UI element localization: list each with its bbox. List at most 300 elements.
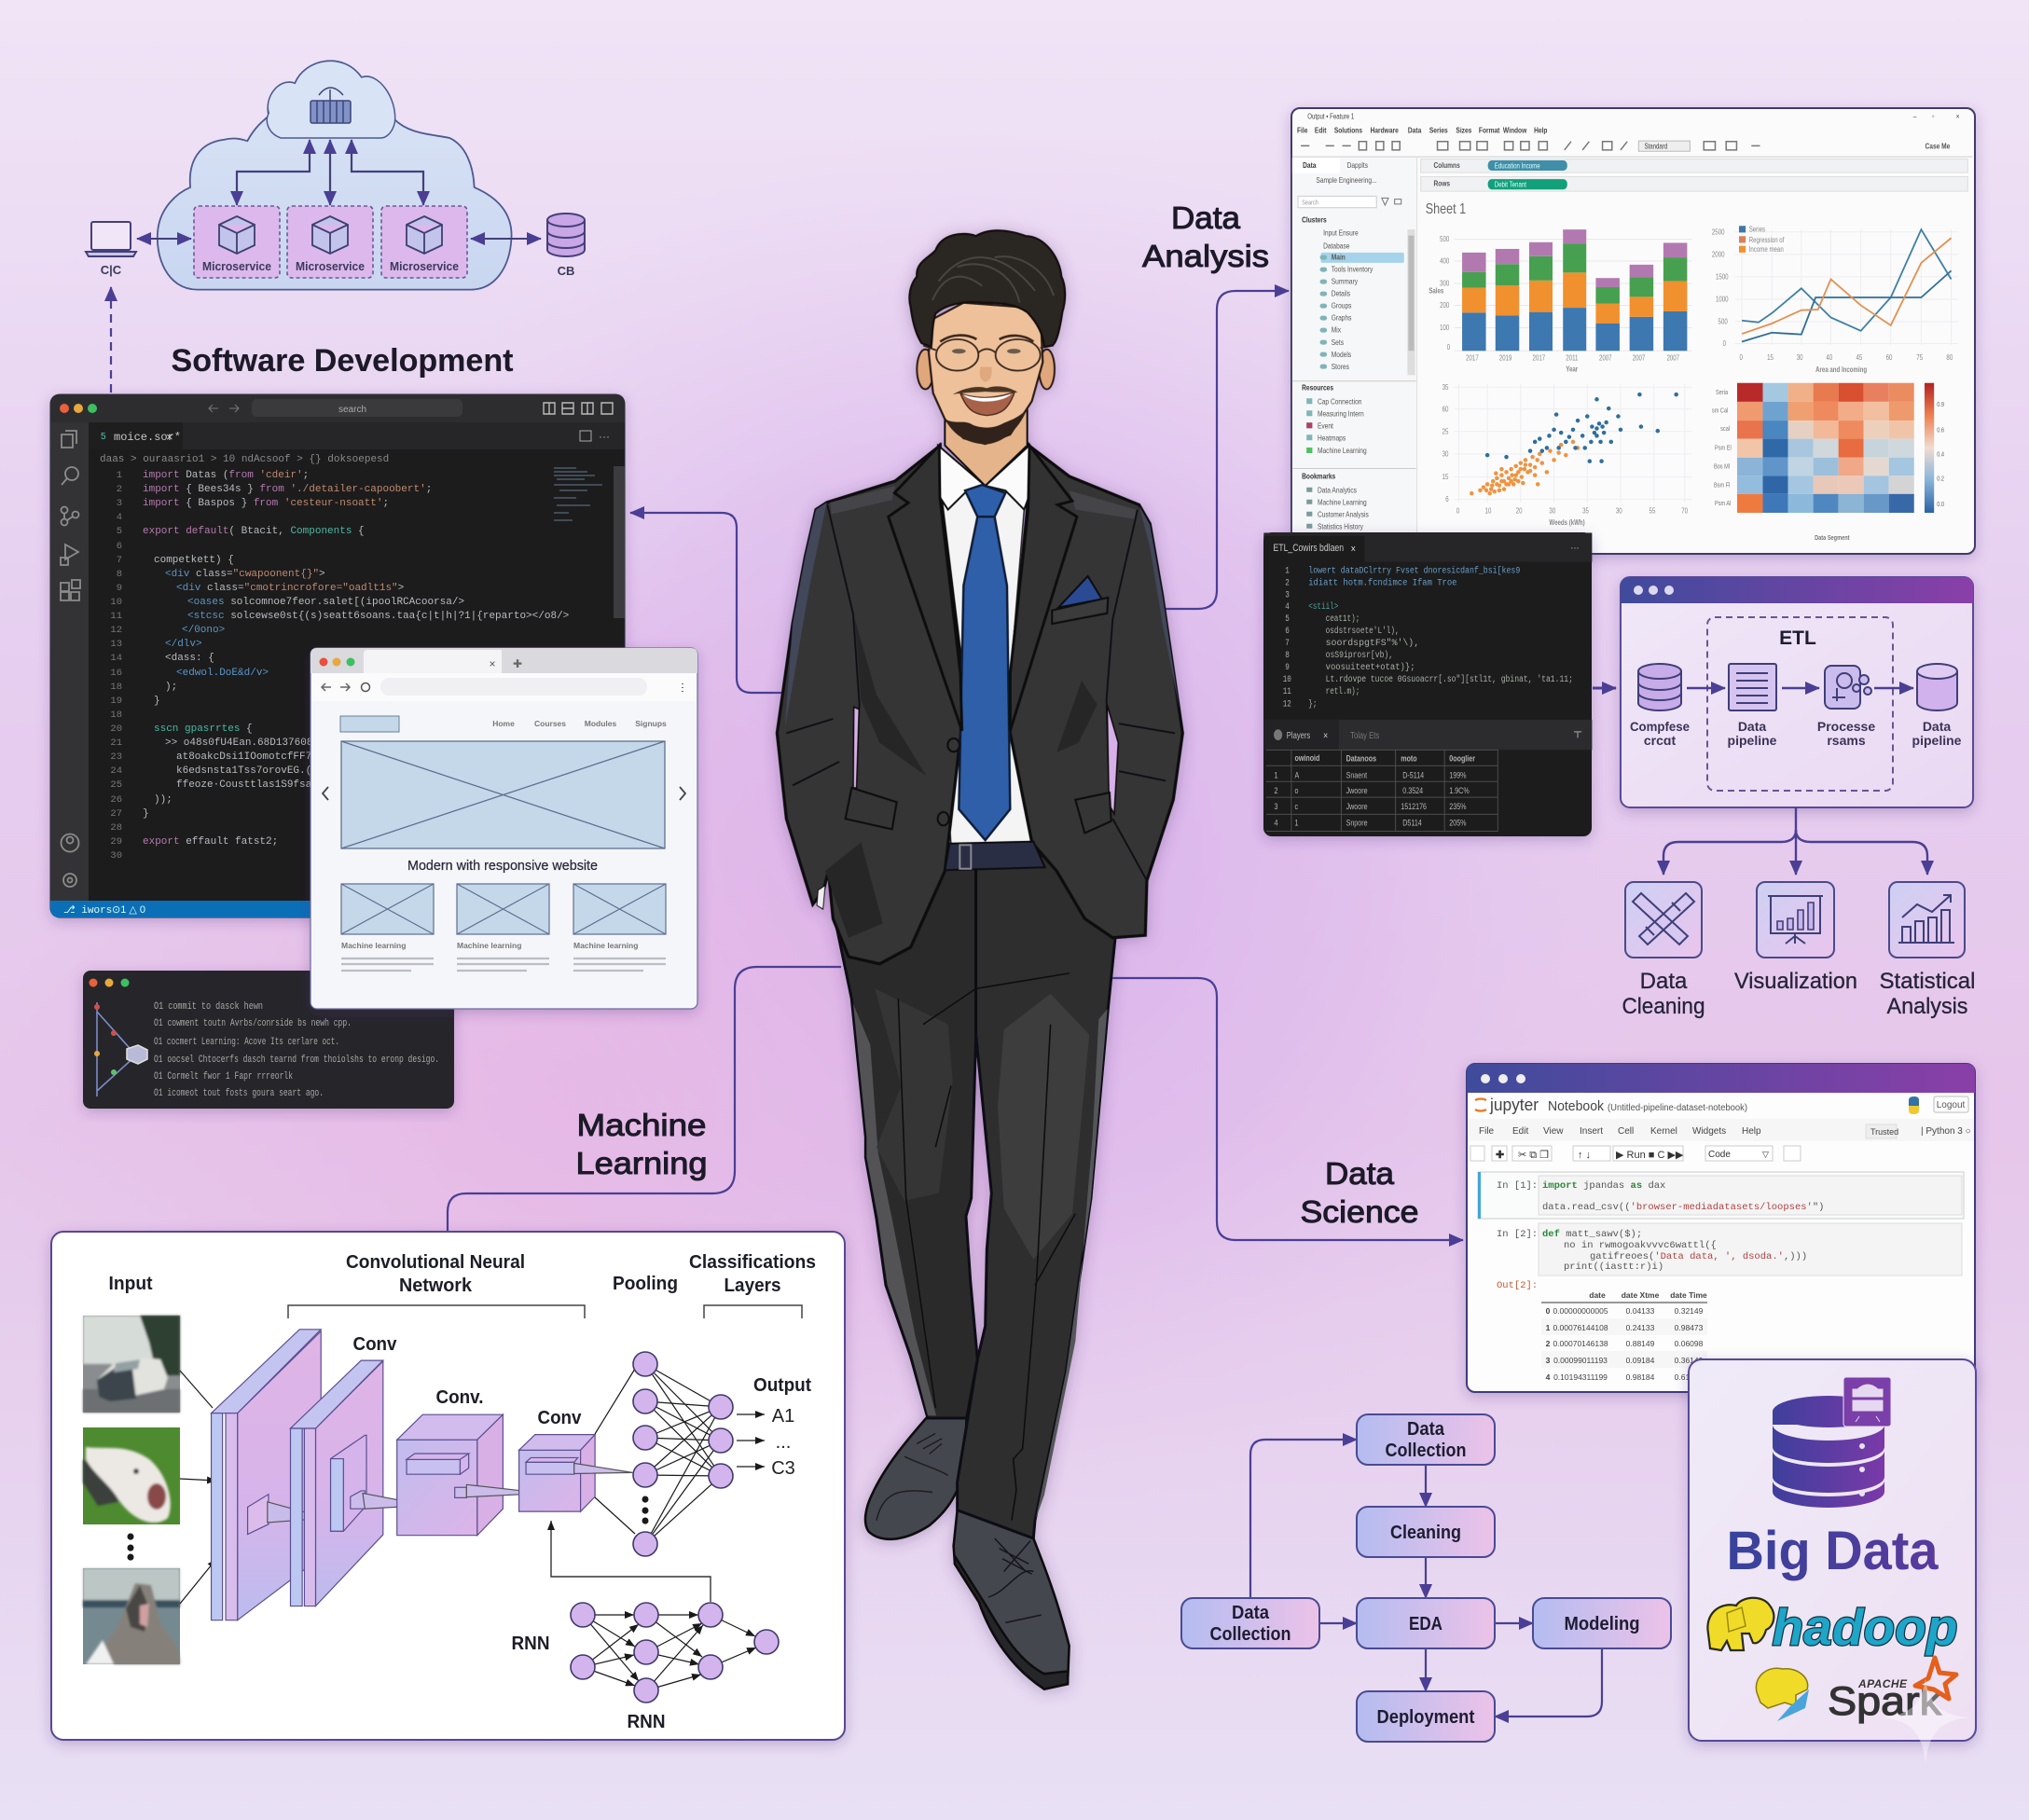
line chart: 0 [1740,354,1743,362]
source code [143,470,569,848]
label: Data Cleaning: Data [1640,969,1688,994]
column headings: Input [108,1274,153,1294]
side pane: Database [1323,241,1349,251]
heatmap: 0.0 [1937,501,1944,508]
line numbers: 16 [110,668,122,679]
step: Data Collection (left) [1181,1598,1319,1648]
stacked bar chart: 100 [1440,325,1449,332]
window menus and toolbar: Edit [1315,126,1327,135]
line numbers: 11 [110,611,122,622]
panel: ETL code editor window [1263,532,1592,836]
browser tab bar [311,648,697,673]
editor tab bar: 5 [101,432,106,442]
panel: code editor window [50,394,625,917]
wireframe cards [341,884,666,971]
source code: export effault fatst2; [143,836,278,848]
ETL code: idiatt hotm.fcndimce Ifam Troe [1308,578,1456,588]
label: process: Processe [1817,719,1875,734]
editor tab bar: ··· [599,430,610,443]
cell 1: import jpandas as dax [1542,1180,1665,1192]
line numbers: 2 [117,484,122,495]
line chart: 1000 [1716,296,1729,304]
label: data pipeline: Data [1738,719,1766,734]
panel: browser wireframe window [311,648,697,1009]
line numbers: 8 [117,569,122,580]
ETL code: lowert dataDClrtry Fvset dnoresicdanf_bsi[kes9 [1308,566,1520,576]
stacked bar chart: Year [1566,366,1578,374]
shirt cuff [817,886,825,909]
collar [938,446,1029,510]
connector: figure to software development [630,513,785,693]
input image: car [83,1316,180,1413]
ETL code: <stiil> [1308,601,1338,612]
hair strands [932,256,1054,303]
side pane: Tools Inventory [1332,265,1373,274]
column headings: Classifications [689,1252,816,1273]
scatter plot: 35 [1582,508,1589,516]
ETL output table: Snaent [1346,770,1368,780]
side pane: Measuring Intern [1318,409,1364,419]
ETL output table: A [1294,770,1300,780]
step: Data Collection (left): Data [1232,1603,1270,1623]
line numbers: 25 [110,779,122,791]
commit messages: O1 cowment toutn Avrbs/conrside bs newh cpp. [154,1018,352,1029]
column headings: Pooling [613,1274,678,1294]
stacked bar chart: Sales [1429,288,1443,296]
notebook output table [1541,1290,1707,1382]
scatter plot: 30 [1442,451,1449,459]
scatter plot: 10 [1485,508,1491,516]
step: Modeling: Modeling [1565,1614,1639,1634]
jupyter logo and title: (Untitled-pipeline-dataset-notebook) [1608,1103,1747,1113]
ETL output table: 1512176 [1401,802,1427,811]
column headings: RNN [511,1634,550,1654]
microservice box 1 [194,206,280,278]
RNN wires [583,1615,756,1690]
jacket body and sleeves [777,446,1182,964]
connector: figure to machine learning [448,967,841,1233]
ETL output table: Datanoos [1346,754,1376,764]
notebook menu: Kernel [1650,1126,1677,1137]
heatmap: 0.2 [1937,476,1944,483]
heatmap: 0.9 [1937,402,1944,408]
scatter plot: 70 [1681,508,1688,516]
line chart: 1500 [1716,274,1729,282]
notebook menu [1468,1119,1974,1141]
notebook output table: 0.61449 [1675,1372,1704,1382]
stacked bar chart [1429,229,1691,374]
notebook output table: date [1589,1290,1606,1300]
panel: cloud microservices diagram [86,61,585,290]
source code: <div class="cwapoonent{}"> [165,569,325,580]
lower body [827,856,1121,1689]
ETL editor tab [1263,532,1592,562]
column headings [108,1252,816,1732]
editor tab bar: moice.sor* [114,431,181,444]
window menus and toolbar: – [1913,112,1917,121]
stacked bar chart: 2011 [1566,355,1579,363]
editor title bar [50,394,625,422]
line chart: 15 [1767,354,1774,362]
logo: Spark with elephant: Spark [1828,1679,1942,1724]
left trouser leg [827,856,977,1418]
heading: Data Science: Data [1325,1156,1395,1191]
ETL editor tab: × [1351,543,1356,556]
side pane: Data Analytics [1318,486,1357,495]
git graph [94,1002,147,1096]
label: source: Compfese [1630,719,1690,734]
input arrows [180,1371,216,1604]
stacked bar chart: 2007 [1599,355,1612,363]
commit messages: O1 oocsel Chtocerfs dasch tearnd from thoiolshs to eronp desigo. [154,1055,439,1066]
source code: export default( Btacit, Components { [143,526,365,537]
eyebrows [940,336,1033,341]
microservice box 2 [287,206,373,278]
scatter plot: Weeds (kWh) [1549,519,1585,527]
stacked bar chart: 400 [1440,258,1449,266]
line chart: Series [1749,227,1765,234]
icon card: visualization [1757,882,1834,958]
ETL output table: 0ooglier [1449,754,1476,764]
ETL code: Lt.rdovpe tucoe 0Gsuoacrr[.so"][stl1t, gbinat, 'ta1.11; [1326,674,1573,684]
heatmap: 0.4 [1937,451,1944,459]
step: Modeling [1533,1598,1671,1648]
step: Deployment [1357,1691,1495,1742]
notebook toolbar: ↑ ↓ [1578,1150,1591,1161]
icon: laptop [86,222,136,256]
shirt [938,446,1033,845]
line numbers: 27 [110,808,122,820]
scatter plot: 30 [1616,508,1622,516]
ETL output table: Jwoore [1346,786,1368,795]
jupyter logo and title: Logout [1937,1100,1966,1110]
stacked bar chart: 2017 [1533,355,1545,363]
source code: import Datas (from 'cdeir'; [143,470,309,481]
source code: } [154,696,160,707]
wireframe navigation: Signups [635,719,667,728]
microservice box 3: Microservice [390,259,459,273]
commit messages: O1 commit to dasck hewn [154,1001,263,1013]
ETL code: osS9iprosr[vb), [1326,650,1393,660]
ETL output table: owinoid [1294,753,1319,763]
heatmap: Bos Ml [1714,463,1730,471]
stacked bar chart: 2017 [1466,355,1479,363]
notebook output table: 0 [1546,1306,1551,1316]
shelves: columns and rows: Debit Tenant [1495,182,1526,189]
icon: server [311,88,351,123]
logo: Spark with elephant [1756,1658,1956,1724]
ETL code: ceat1t); [1326,614,1360,624]
notebook output table: 0.00076144108 [1553,1323,1608,1332]
line numbers: 12 [110,625,122,636]
heading: Data Analysis: Data [1171,200,1241,235]
heatmap [1712,383,1944,542]
editor tab bar [89,422,625,449]
ETL flow arrows [1687,687,1913,689]
ETL code: voosuiteet+otat)}; [1326,662,1415,672]
window menus and toolbar: × [1956,112,1960,121]
heatmap: Bsm Fl [1714,482,1730,489]
line chart: Income mean [1749,247,1784,254]
RNN nodes [571,1603,779,1703]
microservice box 1: Microservice [202,259,271,273]
label: output pipeline: pipeline [1912,733,1962,748]
ETL output table: 1 [1294,819,1299,828]
label: output pipeline: Data [1923,719,1951,734]
notebook menu: Edit [1512,1126,1528,1137]
column headings: Convolutional Neural [346,1252,525,1273]
source code: )); [154,794,173,806]
heading: Data Science [1300,1156,1419,1229]
window menus and toolbar: Case Me [1925,142,1950,151]
notebook output table: 0.32149 [1675,1306,1704,1316]
line numbers: 9 [117,583,122,594]
notebook output table: 0.00070146138 [1553,1339,1608,1348]
hip pocket flaps [846,788,1111,833]
window menus and toolbar: Solutions [1334,126,1362,135]
source code: k6edsnsta1Tss7orovEG.(oa [176,765,324,777]
cell 2: def matt_sawv($); [1542,1229,1642,1240]
line chart: Regression of [1749,237,1784,244]
step: EDA [1357,1598,1495,1648]
cell 2: no in rwmogoakvvvc6wattl({ [1564,1240,1717,1251]
window menus and toolbar: Sizes [1456,126,1471,135]
ETL code: 10 [1283,674,1291,684]
window menus and toolbar: Data [1408,126,1422,135]
source code: </0ono> [182,625,225,636]
notebook toolbar: ✂ ⧉ ❐ [1518,1150,1549,1161]
input image: dog on grass [83,1427,180,1524]
branching arrows from ETL card [1663,807,1927,875]
heading: Data Analysis [1142,200,1269,273]
line chart: Area and Incoming [1815,366,1867,374]
line numbers: 14 [110,653,122,664]
ETL code: }; [1308,699,1317,710]
dense network nodes [633,1352,733,1556]
panel: neural network diagram [51,1232,845,1740]
line numbers [110,470,122,862]
line numbers: 6 [117,541,122,552]
heading: Data Science: Science [1300,1194,1419,1229]
side pane: Sample Engineering... [1316,175,1377,185]
panel: BI dashboard window [1291,108,1975,554]
side pane: Data [1303,160,1317,170]
ETL output table: 235% [1449,802,1467,811]
wireframe card captions: Machine learning [573,941,638,950]
side pane: Dapplts [1347,160,1368,170]
ETL card header [1621,577,1973,603]
icon: output cylinder [1917,664,1957,710]
arrow: cloud to database [471,238,541,240]
icon: source database [1638,664,1681,710]
cell 1 [1478,1172,1964,1219]
label: Data Cleaning [1622,969,1705,1019]
commit messages [154,1001,439,1099]
ETL code: 11 [1283,686,1291,696]
label: database: CB [558,264,574,278]
notebook output table: 3 [1546,1356,1551,1365]
ETL code: 12 [1283,699,1291,710]
line chart: 45 [1856,354,1862,362]
tie [959,485,1010,840]
source code: } [143,808,149,820]
line numbers: 5 [117,526,122,537]
notebook header [1467,1064,1975,1093]
activity bar [50,422,89,901]
buttons [938,738,959,825]
heading: Machine Learning [576,1108,707,1180]
ETL output table: 199% [1449,770,1467,780]
shelves: columns and rows [1421,159,1967,191]
column headings: Output [753,1375,811,1396]
column headings: Network [399,1275,473,1296]
heatmap: 0.6 [1937,427,1944,434]
wireframe card captions [341,941,638,950]
step: Cleaning: Cleaning [1390,1523,1461,1543]
side pane: Statistics History [1318,522,1363,531]
step: Data Collection (top): Collection [1386,1441,1466,1461]
column headings: Conv [537,1408,582,1428]
notebook menu: Help [1742,1126,1761,1137]
side pane: Search [1302,200,1318,207]
heatmap: sm Cal [1712,407,1728,415]
side pane: Graphs [1332,313,1352,323]
arrow: code to ETL card [1593,686,1616,690]
ETL output tabs: Tolay Ets [1350,730,1380,740]
ETL output table: Jwoore [1346,802,1368,811]
line numbers: 13 [110,639,122,650]
input image: cat [83,1568,180,1664]
jupyter logo and title: jupyter [1489,1096,1539,1114]
side pane: Input Ensure [1323,228,1359,238]
convolution layers [212,1330,632,1620]
cloud shape [158,61,512,290]
ears [917,350,1055,389]
label: Statistical Analysis: Statistical [1880,969,1975,994]
output labels with arrows: C3 [771,1458,795,1479]
notebook output table: 0.88149 [1626,1339,1655,1348]
source code: <div class="cmotrincrofore="oadlt1s"> [176,583,404,594]
label: data pipeline [1728,719,1777,748]
column headings: Conv. [436,1387,483,1408]
line chart: 0 [1723,340,1726,348]
label: process [1817,719,1875,748]
window menus and toolbar: Series [1429,126,1448,135]
arrow: dashed up to client [110,287,112,393]
ETL code: soordspgtFS"%'\), [1326,638,1419,648]
sheet title: Sheet 1 [1426,200,1466,217]
notebook output table: 2 [1546,1339,1551,1348]
ETL code: retl.m); [1326,686,1360,696]
left shoe [865,1418,967,1539]
side pane [1292,158,1417,534]
ETL output table: 0.3524 [1402,786,1423,795]
line numbers: 18 [110,682,122,693]
carousel chevrons [323,787,685,800]
notebook toolbar: ✚ [1496,1150,1504,1161]
label: output pipeline [1912,719,1962,748]
source code: import { Baspos } from 'cesteur-nsoatt'; [143,498,389,509]
stacked bar chart: 2019 [1499,355,1512,363]
line numbers: 1 [117,470,122,481]
scatter plot: 0 [1456,508,1459,516]
ETL code: 2 [1285,578,1290,588]
source code: </dlv> [165,639,202,650]
right shoe [954,1510,1070,1689]
side pane: Resources [1302,383,1333,393]
notebook menu: Widgets [1692,1126,1726,1137]
column headings: Layers [724,1275,781,1296]
nose [980,366,992,382]
step: Data Collection (top) [1357,1414,1495,1465]
line numbers: 28 [110,822,122,834]
label: Data Cleaning: Cleaning [1622,994,1705,1019]
line numbers: 4 [117,512,122,523]
line numbers: 3 [117,498,122,509]
scatter plot: 25 [1442,429,1449,436]
shelves: columns and rows: Education Income [1495,163,1540,171]
panel: Big Data [1689,1359,1976,1741]
ETL code: 9 [1285,662,1290,672]
step: Data Collection (left): Collection [1210,1624,1291,1645]
moustache [953,386,1018,394]
source code: <dass: { [165,653,214,664]
source code: ); [165,682,177,693]
ETL output table: 3 [1275,802,1278,811]
notebook output table: 0.24133 [1626,1323,1655,1332]
status bar: ⎇ iwors [63,904,112,917]
heading: Data Analysis: Analysis [1142,239,1269,273]
ETL output tabs [1263,720,1592,750]
window menus and toolbar [1292,112,1973,157]
microservice box 2: Microservice [296,259,365,273]
source code: <edwol.DoE&d/v> [176,668,269,679]
cell 2: In [2]: [1497,1229,1538,1240]
scatter plot: 15 [1442,475,1449,481]
shelves: columns and rows: Columns [1433,160,1460,170]
commit messages: O1 icomeot tout fosts goura seart ago. [154,1088,324,1099]
right trouser leg [958,856,1121,1538]
source code: ffeoze·Cousttlas1S9fsatsu [176,779,330,791]
stacked bar chart: 300 [1440,281,1449,288]
window menus and toolbar: Output • Feature 1 [1307,114,1354,121]
line chart: 500 [1718,319,1728,326]
label: Statistical Analysis [1880,969,1975,1019]
column headings: RNN [627,1712,666,1732]
ETL code: 4 [1285,601,1290,612]
wireframe navigation: Home [492,719,515,728]
line numbers: 23 [110,751,122,763]
window menus and toolbar: File [1297,126,1307,135]
notebook output label: Out[2]: [1497,1280,1538,1291]
side pane: Cap Connection [1318,397,1361,407]
line numbers: 21 [110,738,122,749]
label: source [1630,719,1690,748]
ETL output table: Snpore [1346,819,1368,828]
notebook output table: 0.98184 [1626,1372,1655,1382]
line chart [1712,226,1958,374]
icon: database [547,214,585,256]
smile [960,392,1014,416]
cell 1: In [1]: [1497,1180,1538,1192]
column headings: Conv [352,1334,397,1355]
browser tab bar: ✚ [513,657,522,670]
ETL output table: moto [1401,754,1417,764]
editor tab bar: × [166,430,173,444]
line numbers: 24 [110,765,122,777]
source code: import { Bees34s } from './detailer-capoobert'; [143,484,432,495]
notebook output table: 4 [1546,1372,1551,1382]
